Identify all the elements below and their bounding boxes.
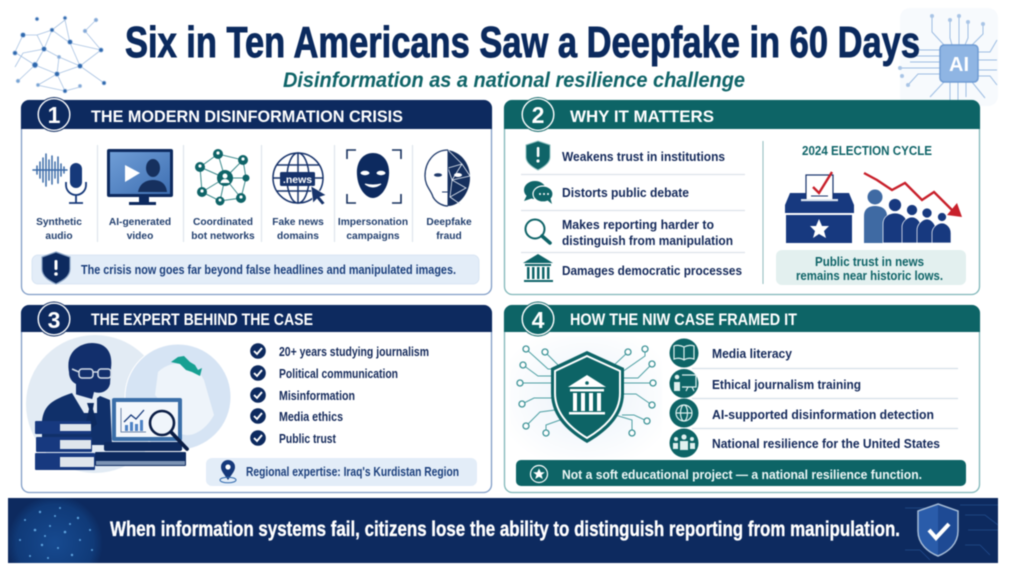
list: framing items: AI-supported disinformation detection: [712, 408, 934, 422]
icon: magnifier: [526, 220, 550, 243]
checklist: expertise: 20+ years studying journalism: [279, 345, 429, 359]
panel 2: why it matters: [504, 97, 980, 294]
icon: speech bubbles: [524, 181, 553, 204]
row: weakens trust: Weakens trust in institutions: [562, 150, 725, 164]
panel 3 header: 3: [48, 307, 60, 333]
panel 1 header: [21, 97, 492, 132]
icon labels: crisis types: Coordinated: [193, 217, 253, 228]
callout: public trust: Public trust in news: [815, 255, 924, 269]
laptop: [95, 398, 186, 466]
icon labels: crisis types: AI-generated: [109, 217, 171, 228]
panel 1 header: 1: [48, 102, 61, 128]
row: makes reporting harder: Makes reporting harder to: [562, 218, 714, 232]
icon: ballot box: [785, 172, 854, 243]
panel 1: the modern disinformation crisis: [21, 97, 492, 294]
icon: AI chip: [898, 8, 998, 106]
icon labels: crisis types: [36, 217, 472, 242]
banner: closing statement: [7, 497, 999, 564]
icon: AI chip: AI: [949, 54, 969, 76]
subtitle: Disinformation as a national resilience challenge: [283, 69, 745, 92]
icon: impersonation mask: [347, 150, 401, 203]
panel 3: the expert behind the case: [21, 302, 492, 492]
list: framing items: National resilience for the United States: [712, 437, 940, 451]
icon: institution: [523, 254, 553, 282]
panel 2 header: WHY IT MATTERS: [570, 107, 714, 126]
panel 4 header: HOW THE NIW CASE FRAMED IT: [570, 310, 798, 329]
illustration: shield with circuits: [510, 336, 662, 458]
panel 2 header: [504, 97, 980, 132]
books stack: [35, 421, 95, 470]
checklist: expertise: Political communication: [279, 367, 398, 381]
callout: national resilience function: Not a soft educational project — a national resilience function.: [562, 467, 922, 482]
row: damages processes: Damages democratic processes: [562, 264, 742, 278]
icon: AI-generated video: [107, 149, 173, 205]
heading: 2024 election cycle: 2024 ELECTION CYCLE: [802, 144, 932, 158]
checklist: expertise: Public trust: [279, 432, 337, 446]
icon: shield alert: [526, 141, 550, 170]
checklist: expertise: Misinformation: [279, 389, 355, 403]
icon: fake news domain globe: .news: [283, 174, 312, 186]
icon: declining trust people: [864, 173, 962, 243]
icon: deepfake face: [425, 150, 470, 206]
illustration: expert with globe, laptop and books: [26, 335, 231, 473]
icon: digital globe: [10, 498, 100, 564]
magnifier: [150, 411, 187, 449]
callout: beyond false headlines: [32, 252, 479, 284]
panel 4: how the NIW case framed it: [504, 302, 980, 492]
callout: regional expertise: [206, 458, 477, 486]
callout: public trust: [776, 250, 966, 285]
panel 1 header: THE MODERN DISINFORMATION CRISIS: [91, 107, 403, 126]
icon labels: crisis types: audio: [45, 231, 73, 242]
row: makes reporting harder: [562, 218, 733, 248]
panel 4 header: [504, 302, 980, 336]
icon labels: crisis types: Synthetic: [36, 217, 82, 228]
list: framing items: Media literacy: [712, 347, 792, 361]
callout: national resilience function: [516, 460, 966, 486]
row: distorts debate: Distorts public debate: [562, 186, 689, 200]
callout: public trust: remains near historic lows.: [796, 269, 943, 283]
circuit texture: [905, 505, 998, 560]
icon: network constellation: [13, 16, 106, 93]
icon labels: crisis types: video: [127, 231, 153, 242]
icon labels: crisis types: bot networks: [191, 231, 255, 242]
icon labels: crisis types: campaigns: [346, 231, 400, 242]
checklist: expertise: Media ethics: [279, 410, 343, 424]
callout: beyond false headlines: The crisis now goes far beyond false headlines and manipulated images.: [81, 263, 456, 277]
icon: shield check: [918, 504, 958, 556]
row: makes reporting harder: distinguish from manipulation: [562, 234, 733, 248]
checklist: expertise: [250, 343, 429, 446]
list: framing items: [670, 338, 940, 458]
list: framing items: Ethical journalism training: [712, 378, 861, 392]
icon labels: crisis types: fraud: [436, 231, 462, 242]
icon labels: crisis types: Deepfake: [426, 217, 472, 228]
panel 2 header: 2: [532, 102, 544, 128]
panel 3 header: THE EXPERT BEHIND THE CASE: [91, 310, 313, 329]
icon labels: crisis types: Impersonation: [338, 217, 408, 228]
icon: fake news domain globe: [273, 153, 326, 205]
callout: regional expertise: Regional expertise: Iraq's Kurdistan Region: [246, 465, 459, 479]
panel 3 header: [21, 302, 492, 336]
icon: synthetic audio: [33, 154, 86, 203]
icon: coordinated bot networks: [195, 149, 250, 206]
icon labels: crisis types: Fake news: [272, 217, 324, 228]
icon labels: crisis types: domains: [277, 231, 319, 242]
panel 4 header: 4: [532, 307, 545, 333]
